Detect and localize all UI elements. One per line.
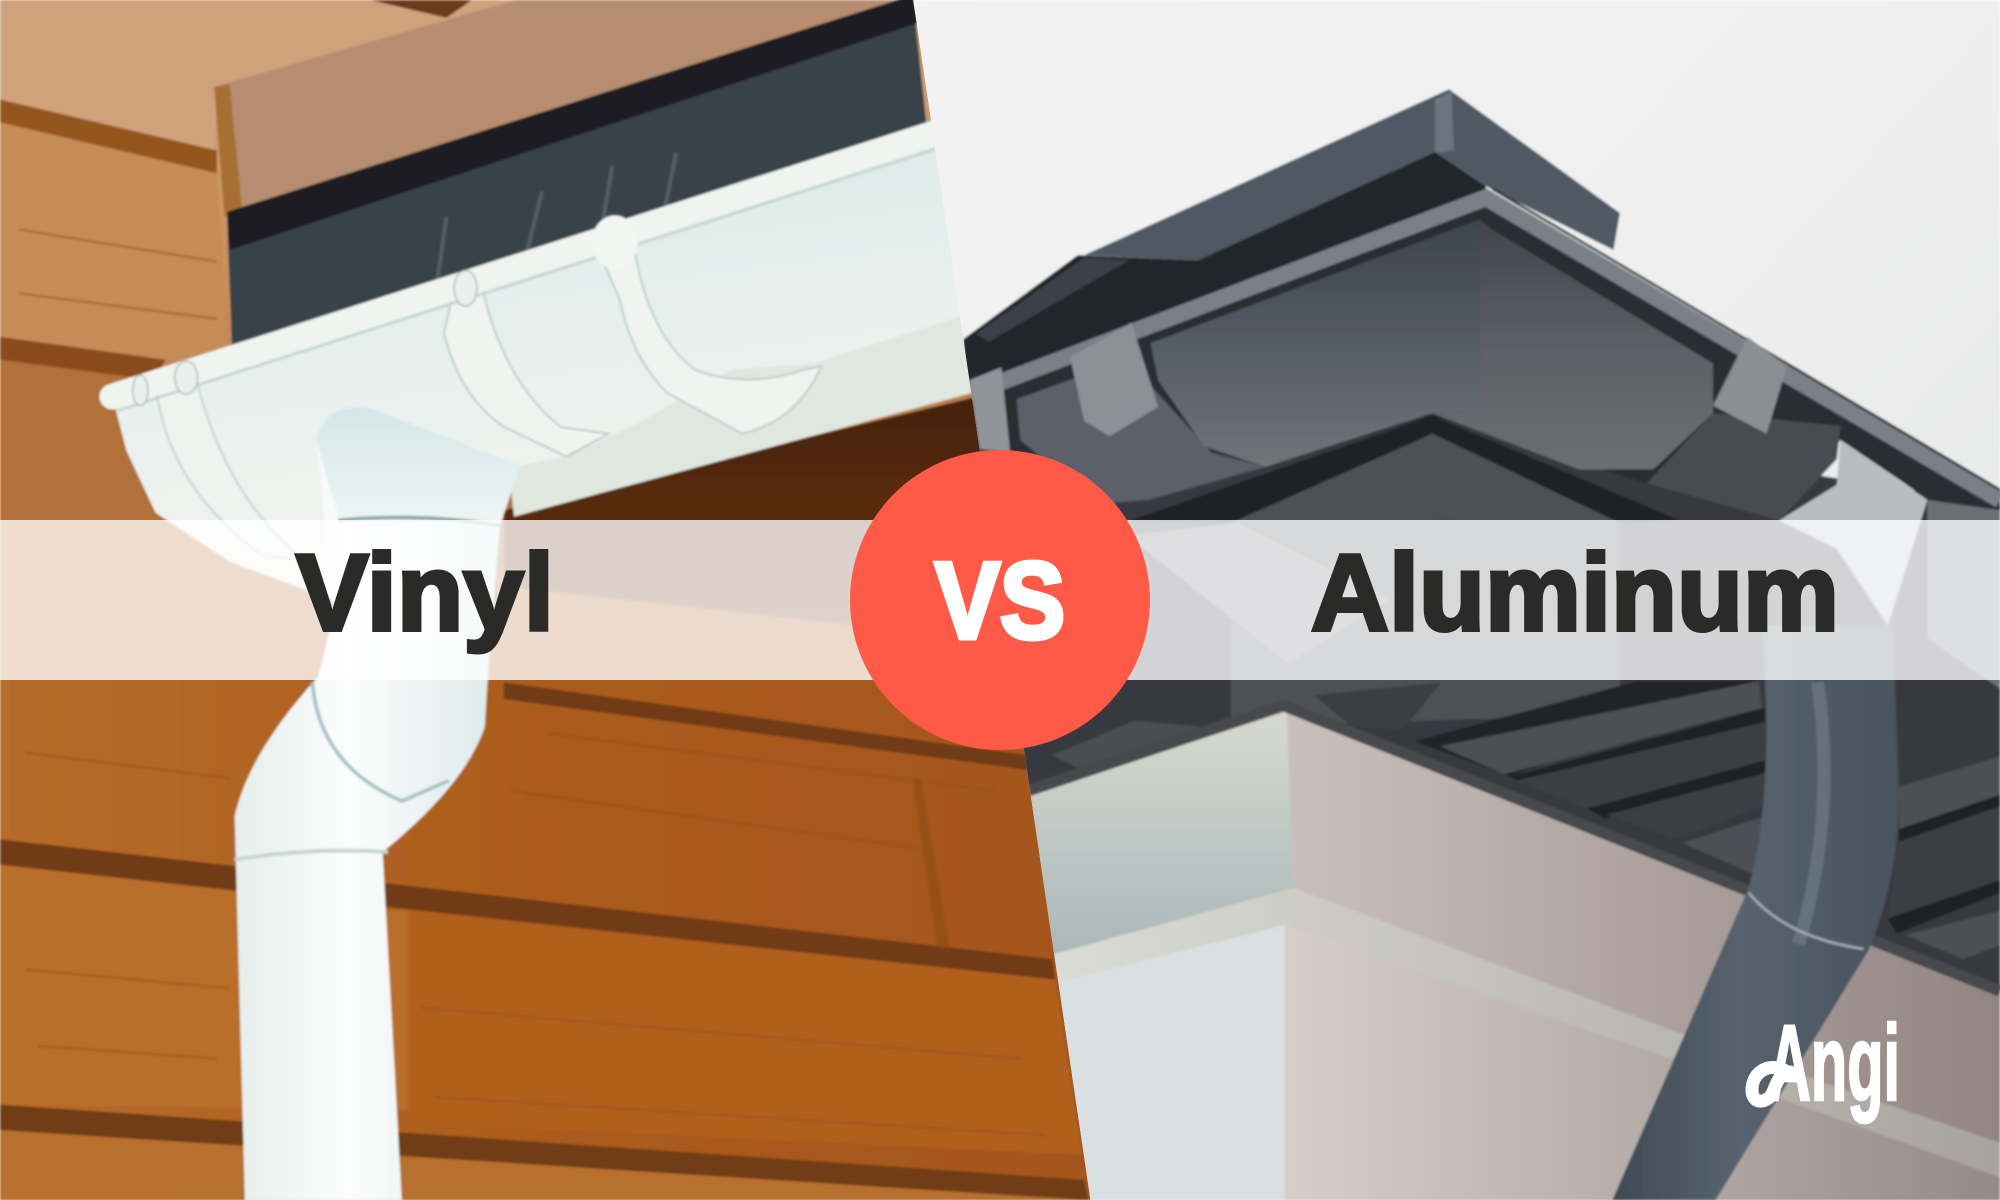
right gutter section (1647, 413, 1841, 520)
logo: Angi (1752, 1002, 1900, 1123)
gutter rim (112, 133, 936, 397)
gutter face right (1432, 219, 1713, 469)
dark under roof (963, 152, 1486, 398)
light soffit panels under band (1136, 524, 1232, 616)
vs badge: VS (935, 540, 1065, 662)
wood grain streaks (19, 230, 1046, 1135)
heading: Aluminum: Aluminum (1311, 532, 1839, 654)
wall: left fascia (1031, 712, 1293, 954)
black flashing (227, 0, 927, 352)
dark soffit (966, 415, 2000, 1001)
white trim (1054, 888, 2000, 1180)
dark wood under gutter (504, 395, 992, 638)
gutter bracket: large (604, 254, 823, 435)
stucco (1057, 925, 1288, 1200)
fascia under gutter (504, 255, 972, 517)
photo: aluminum gutter under roof corner (893, 0, 2000, 1200)
gutter bracket: middle (444, 283, 608, 457)
left gutter section (1017, 370, 1265, 504)
roof cap (1084, 89, 1620, 260)
wall: right fascia (1287, 708, 2000, 1143)
gutter bracket: far end (156, 386, 266, 520)
wall backing (1030, 710, 1286, 954)
gutter backing (972, 206, 2000, 509)
wall edge line (1028, 705, 2000, 991)
soffit panels (1052, 681, 2000, 959)
left clip (1070, 323, 1158, 436)
photo: vinyl gutter on wood siding (0, 0, 1097, 1200)
right clip (1713, 337, 1787, 434)
downpipe (232, 456, 501, 1200)
translucent band (0, 520, 2000, 680)
gutter body (115, 138, 960, 599)
gutter rim (966, 198, 2000, 500)
heading: Vinyl: Vinyl (296, 532, 554, 654)
vs badge (850, 450, 1150, 750)
upper board (214, 0, 913, 217)
downspout (1612, 625, 1899, 1200)
gutter face left (1151, 219, 1480, 467)
